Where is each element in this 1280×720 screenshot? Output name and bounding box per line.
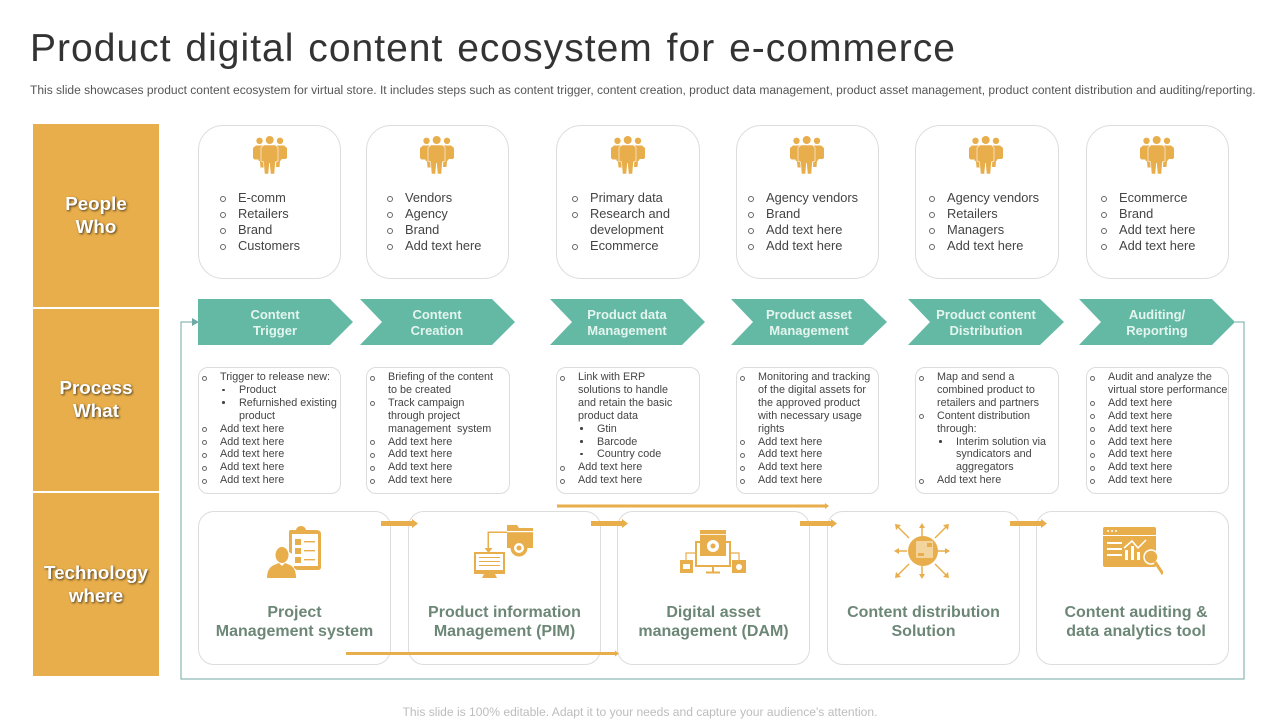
process list 2: to be created <box>388 384 451 396</box>
step label: product asset management: Product asset <box>766 307 852 322</box>
step label: auditing reporting: Auditing/ <box>1129 307 1185 322</box>
icon: people 6 <box>1140 136 1174 174</box>
process list 6: virtual store performance <box>1108 384 1227 396</box>
process list 3: product data <box>578 410 638 422</box>
people card 5 <box>915 125 1059 279</box>
people list 4 <box>748 190 858 252</box>
people list 1 <box>220 190 300 252</box>
people list 6: Add text here <box>1119 222 1195 236</box>
people card 6 <box>1086 125 1229 279</box>
process list 4: with necessary usage <box>758 410 862 422</box>
step label: auditing reporting: Reporting <box>1126 323 1188 338</box>
process list 2: Track campaign <box>388 397 464 409</box>
icon: people 3 <box>611 136 645 174</box>
process list 4: Add text here <box>758 436 822 448</box>
people list 3 <box>572 190 670 252</box>
row header: people who <box>33 124 159 307</box>
people list 5 <box>929 190 1039 252</box>
people list 6: Add text here <box>1119 238 1195 252</box>
people list 4: Brand <box>766 206 800 220</box>
people list 1: Brand <box>238 222 272 236</box>
row header: process what: What <box>73 400 119 421</box>
process list 4: Monitoring and tracking <box>758 371 870 383</box>
feedback loop line <box>180 318 1244 680</box>
process list 4: Add text here <box>758 461 822 473</box>
step label: product content distribution <box>936 307 1036 338</box>
tech label 4: Content distribution <box>847 604 1000 620</box>
people list 3: Primary data <box>590 190 663 204</box>
icon: product information management <box>474 525 533 578</box>
process list 6: Audit and analyze the <box>1108 371 1212 383</box>
step label: product data management: Management <box>587 323 667 338</box>
process card 4 <box>736 367 879 494</box>
process list 3: Country code <box>597 448 661 460</box>
tech label 4: Solution <box>892 622 955 640</box>
technology card 2 <box>408 511 601 665</box>
step label: content trigger: Content <box>250 307 300 322</box>
process list 6 <box>1090 371 1227 486</box>
process list 5 <box>919 371 1046 486</box>
process list 2 <box>370 371 493 486</box>
process list 3: Link with ERP <box>578 371 645 383</box>
tech label 1: Project <box>267 604 322 620</box>
tech label 3: Digital asset <box>666 604 761 620</box>
process list 6: Add text here <box>1108 474 1172 486</box>
process list 6: Add text here <box>1108 436 1172 448</box>
process list 5: Interim solution via <box>956 436 1046 448</box>
technology card 3 <box>617 511 810 665</box>
process list 5: through: <box>937 423 977 435</box>
technology card 4 <box>827 511 1020 665</box>
step label: product data management <box>587 307 667 338</box>
tech label 1 <box>216 604 373 640</box>
icon: project management <box>267 526 321 578</box>
process list 4: the approved product <box>758 397 860 409</box>
step label: content trigger <box>250 307 300 338</box>
tech label 3 <box>638 604 789 640</box>
process list 1: product <box>239 410 275 422</box>
row header: technology where: Technology <box>44 562 148 582</box>
process list 5: retailers and partners <box>937 397 1039 409</box>
process list 4: of the digital assets for <box>758 384 866 396</box>
people list 6: Brand <box>1119 206 1153 220</box>
process card 6 <box>1086 367 1229 494</box>
people card 3 <box>556 125 700 279</box>
process list 3: Gtin <box>597 423 617 435</box>
people list 3: Research and <box>590 206 670 220</box>
process list 2: Add text here <box>388 474 452 486</box>
people list 1: E-comm <box>238 190 286 204</box>
process list 2: Add text here <box>388 461 452 473</box>
step label: content trigger: Trigger <box>253 323 297 338</box>
process list 6: Add text here <box>1108 423 1172 435</box>
process list 5: combined product to <box>937 384 1035 396</box>
row header: technology where <box>33 493 159 676</box>
process chevrons <box>198 299 1235 345</box>
people card 2 <box>366 125 509 279</box>
process list 5: Map and send a <box>937 371 1014 383</box>
process list 1: Add text here <box>220 423 284 435</box>
people list 4: Agency vendors <box>766 190 858 204</box>
people list 3: Ecommerce <box>590 238 659 252</box>
process list 1: Add text here <box>220 436 284 448</box>
tech label 2: Management (PIM) <box>434 622 575 640</box>
process list 2: through project <box>388 410 460 422</box>
technology card 5 <box>1036 511 1229 665</box>
people list 5: Agency vendors <box>947 190 1039 204</box>
tech label 4 <box>847 604 1000 640</box>
process list 4: Add text here <box>758 448 822 460</box>
icon: digital asset management <box>680 530 746 574</box>
icon: people 1 <box>253 136 287 174</box>
process list 1: Add text here <box>220 461 284 473</box>
process list 2: management system <box>388 423 491 435</box>
tech label 5: Content auditing & <box>1064 604 1208 620</box>
process list 3: solutions to handle <box>578 384 668 396</box>
process card 2 <box>366 367 510 494</box>
icon: content auditing <box>1103 527 1163 575</box>
people list 2: Brand <box>405 222 439 236</box>
people list 5: Managers <box>947 222 1004 236</box>
step label: product asset management: Management <box>769 323 849 338</box>
people list 2: Agency <box>405 206 448 220</box>
row header: people who: People <box>65 192 127 214</box>
people list 6 <box>1101 190 1195 252</box>
process list 1 <box>202 371 337 486</box>
people list 1: Customers <box>238 238 300 252</box>
icon: content distribution <box>894 523 950 579</box>
step label: product content distribution: Product content <box>936 307 1036 322</box>
step label: auditing reporting <box>1126 307 1188 338</box>
process list 4: Add text here <box>758 474 822 486</box>
subtitle: This slide showcases product content ecosystem for virtual store. It includes steps such as content trigger, content creation, product data management, product asset management, product content distribution and auditing/reporting. <box>30 83 1256 97</box>
process list 6: Add text here <box>1108 448 1172 460</box>
people card 4 <box>736 125 879 279</box>
process list 4 <box>740 371 870 486</box>
people list 5: Retailers <box>947 206 998 220</box>
process list 3: and retain the basic <box>578 397 672 409</box>
process list 5: aggregators <box>956 461 1014 473</box>
icon: people 5 <box>969 136 1003 174</box>
row header: technology where: where <box>69 584 123 606</box>
process list 2: Add text here <box>388 448 452 460</box>
people list 2 <box>387 190 481 252</box>
footer note: This slide is 100% editable. Adapt it to your needs and capture your audience's attention. <box>403 705 877 719</box>
process card 1 <box>198 367 341 494</box>
tech label 3: management (DAM) <box>638 622 789 640</box>
process list 5: syndicators and <box>956 448 1032 460</box>
process list 1: Trigger to release new: <box>220 371 330 383</box>
process list 6: Add text here <box>1108 461 1172 473</box>
title: Product digital content ecosystem for e-commerce <box>30 27 956 70</box>
step label: content creation <box>411 307 463 338</box>
technology card 1 <box>198 511 391 665</box>
process list 2: Briefing of the content <box>388 371 493 383</box>
icon: people 2 <box>420 136 454 174</box>
process card 3 <box>556 367 700 494</box>
tech label 5: data analytics tool <box>1066 622 1206 640</box>
people list 4: Add text here <box>766 238 842 252</box>
process list 1: Add text here <box>220 448 284 460</box>
process list 3: Add text here <box>578 461 642 473</box>
people list 6: Ecommerce <box>1119 190 1188 204</box>
step label: content creation: Creation <box>411 323 463 338</box>
step label: content creation: Content <box>412 307 462 322</box>
step label: product asset management <box>766 307 852 338</box>
people card 1 <box>198 125 341 279</box>
row header: process what: Process <box>59 377 133 398</box>
process list 6: Add text here <box>1108 410 1172 422</box>
people list 2: Add text here <box>405 238 481 252</box>
process list 6: Add text here <box>1108 397 1172 409</box>
process list 5: Content distribution <box>937 410 1030 422</box>
process list 1: Add text here <box>220 474 284 486</box>
people list 4: Add text here <box>766 222 842 236</box>
people list 3: development <box>590 222 664 236</box>
step label: product content distribution: Distribution <box>950 323 1022 338</box>
step label: product data management: Product data <box>587 307 667 322</box>
process list 3: Barcode <box>597 436 637 448</box>
tech label 1: Management system <box>216 622 373 640</box>
row header: people who: Who <box>76 216 116 236</box>
process list 5: Add text here <box>937 474 1001 486</box>
process list 1: Refurnished existing <box>239 397 337 409</box>
people list 2: Vendors <box>405 190 452 204</box>
tech label 2 <box>428 604 581 640</box>
process list 1: Product <box>239 384 276 396</box>
process list 3: Add text here <box>578 474 642 486</box>
process list 3 <box>560 371 672 486</box>
flow arrows between technology cards <box>346 503 1047 656</box>
tech label 5 <box>1064 604 1208 640</box>
icon: people 4 <box>790 136 824 174</box>
row header: process what <box>33 309 159 491</box>
process list 2: Add text here <box>388 436 452 448</box>
people list 5: Add text here <box>947 238 1023 252</box>
process card 5 <box>915 367 1059 494</box>
tech label 2: Product information <box>428 604 581 620</box>
people list 1: Retailers <box>238 206 289 220</box>
process list 4: rights <box>758 423 784 435</box>
